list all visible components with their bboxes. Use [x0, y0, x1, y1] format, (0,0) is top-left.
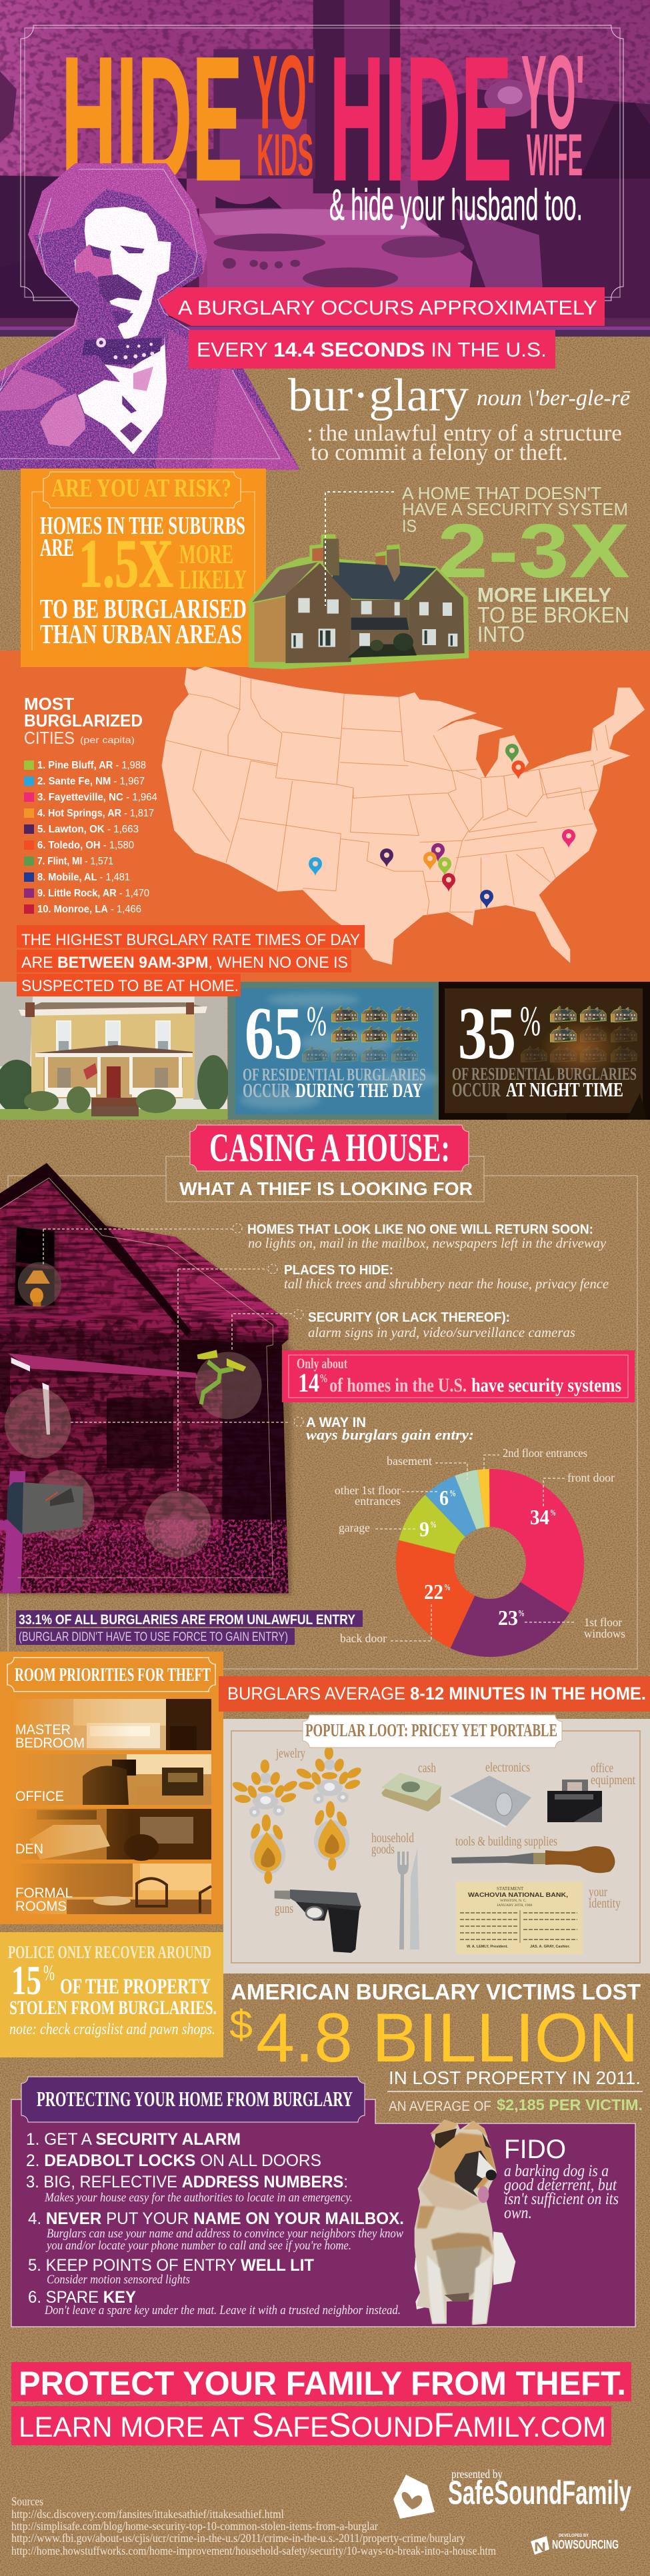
legend list	[37, 760, 157, 915]
magenta haunted house illustration	[0, 1160, 293, 1600]
dog caption: isn't sufficient on its	[504, 2190, 619, 2208]
orange map section background	[0, 650, 650, 982]
burglar portrait	[0, 160, 307, 470]
callout: 14 percent	[282, 1350, 635, 1402]
item: security	[294, 1310, 575, 1340]
legend list: 3. Fayetteville, NC - 1,964	[37, 792, 157, 803]
room: master bedroom: MASTER	[15, 1722, 71, 1738]
protecting label: PROTECTING YOUR HOME FROM BURGLARY	[37, 2087, 353, 2111]
big multiplier: 2-3X	[437, 509, 630, 594]
police line 1: POLICE ONLY RECOVER AROUND	[8, 1942, 211, 1962]
chart values: 22	[424, 1580, 443, 1604]
stat into: INTO	[477, 622, 525, 646]
panel: popular loot	[223, 1715, 650, 1973]
room: office	[13, 1754, 211, 1805]
legend title 1: MOST	[24, 694, 74, 714]
chart values: 34	[530, 1505, 549, 1529]
dollar sign: $	[229, 2002, 253, 2047]
chart values: %	[430, 1520, 437, 1530]
room: formal rooms	[13, 1864, 211, 1914]
chart labels: basement	[387, 1454, 432, 1468]
night caption 2: OCCUR	[452, 1078, 501, 1101]
item: security: SECURITY (OR LACK THEREOF):	[308, 1310, 510, 1325]
room: master bedroom	[13, 1699, 211, 1751]
tips list	[26, 2130, 404, 2317]
times line 1: THE HIGHEST BURGLARY RATE TIMES OF DAY	[21, 931, 360, 949]
big number: 35	[458, 992, 516, 1075]
loot: gun	[275, 1890, 361, 1953]
callout: 14 percent: Only about	[297, 1355, 347, 1372]
source 4: http://home.howstuffworks.com/home-improvement/household-safety/security/10-ways-to-break-into-a-house.htm	[11, 2544, 496, 2557]
banner: highest burglary times	[17, 925, 365, 996]
stat sub line: IN LOST PROPERTY IN 2011.	[389, 2067, 641, 2088]
loot: electronics	[449, 1760, 531, 1828]
stat: billion lost	[229, 1979, 643, 2114]
tips list: 5. KEEP POINTS OF ENTRY WELL LIT	[28, 2256, 314, 2275]
call to action	[11, 2362, 631, 2445]
heading: casing a house: CASING A HOUSE:	[209, 1126, 450, 1170]
legend list: 5. Lawton, OK - 1,663	[37, 824, 139, 835]
house icons, night	[521, 1006, 637, 1062]
chart leader lines	[375, 1455, 574, 1641]
legend list: 2. Sante Fe, NM - 1,967	[37, 776, 145, 787]
presented by text: presented by	[451, 2467, 503, 2481]
dog photo: Fido	[415, 2119, 515, 2325]
panel: 65 percent daytime	[228, 982, 440, 1120]
cta band one	[11, 2362, 631, 2401]
cta band two	[11, 2406, 611, 2445]
stat line 1: A HOME THAT DOESN'T	[402, 483, 601, 503]
police line 2: OF THE PROPERTY	[60, 1975, 211, 1999]
panel: are you at risk	[21, 469, 266, 667]
chart values: %	[550, 1508, 556, 1518]
chart labels	[335, 1446, 625, 1645]
dog caption: good deterrent, but	[504, 2176, 617, 2194]
legend: most burglarized cities	[24, 694, 157, 915]
chart values: 23	[498, 1606, 518, 1630]
tips list: 1. GET A SECURITY ALARM	[26, 2130, 241, 2149]
ornate header frame	[21, 25, 623, 301]
icon: house and heart	[393, 2475, 435, 2519]
risk text: burglarised: TO BE BURGLARISED	[40, 593, 247, 624]
map pins	[309, 744, 575, 908]
chart values: %	[444, 1583, 451, 1593]
subheading: WHAT A THIEF IS LOOKING FOR	[179, 1178, 473, 1199]
source 3: http://www.fbi.gov/about-us/cjis/ucr/crime-in-the-u.s/2011/crime-in-the-u.s.-2011/property-crime/burglary	[11, 2531, 465, 2545]
banner: burglars average minutes: BURGLARS AVERAGE 8-12 MINUTES IN THE HOME.	[227, 1684, 646, 1704]
average text: AN AVERAGE OF	[389, 2099, 491, 2114]
loot: cash: cash	[418, 1761, 436, 1776]
police line 3: STOLEN FROM BURGLARIES.	[9, 1997, 217, 2019]
cta line two: LEARN MORE AT SAFESOUNDFAMILY.COM	[19, 2406, 606, 2444]
tips list: you and/or locate your phone number to call and see if you're home.	[45, 2239, 351, 2253]
heading: casing a house	[190, 1125, 469, 1171]
panel: police recover	[0, 1932, 223, 2057]
subheading box	[166, 1156, 484, 1202]
item: a way in	[294, 1415, 474, 1443]
item: no one home: HOMES THAT LOOK LIKE NO ONE WILL RETURN SOON:	[247, 1222, 593, 1237]
tips list: 3. BIG, REFLECTIVE ADDRESS NUMBERS:	[26, 2173, 348, 2191]
item: no one home	[233, 1222, 607, 1251]
loot: identity statement: JAS. A. GRAY, Cashier.	[530, 1945, 570, 1949]
loot: household goods: goods	[371, 1842, 395, 1857]
chart values: %	[449, 1489, 456, 1499]
police note: note: check craigslist and pawn shops.	[9, 2021, 215, 2038]
chart values	[419, 1486, 556, 1630]
legend list: 4. Hot Springs, AR - 1,817	[37, 808, 154, 819]
legend list: 9. Little Rock, AR - 1,470	[37, 888, 149, 899]
chart labels: entrances	[355, 1494, 401, 1508]
loot: office equipment: equipment	[591, 1773, 635, 1788]
chart labels: front door	[567, 1471, 615, 1484]
tips list: Don't leave a spare key under the mat. Leave it with a trusted neighbor instead.	[44, 2303, 401, 2317]
icon: mailbox	[0, 1471, 83, 1593]
loot: identity statement: WACHOVIA NATIONAL BANK,	[468, 1892, 568, 1899]
band one	[159, 287, 605, 326]
purple ledge strip	[0, 318, 650, 337]
loot: identity statement: JANUARY 20TH, 1908	[497, 1904, 532, 1908]
risk label	[43, 472, 241, 508]
checklist: what a thief looks for	[233, 1222, 635, 1443]
definition	[288, 370, 631, 465]
item: a way in: A WAY IN	[306, 1415, 366, 1430]
meaning line 1: : the unlawful entry of a structure	[307, 420, 622, 446]
thin frame around casing section	[8, 1176, 637, 1669]
panel: 35 percent night	[439, 982, 650, 1120]
loot: identity statement: your	[589, 1885, 607, 1900]
loot: identity statement	[456, 1882, 621, 1954]
band two	[189, 330, 555, 369]
dotted callout to house	[325, 492, 394, 606]
orange patch under risk panel	[21, 650, 266, 667]
tips list: Burglars can use your name and address to convince your neighbors they know	[47, 2227, 403, 2241]
house photo: yellow house	[0, 982, 229, 1120]
chart values: %	[518, 1609, 525, 1619]
chart values: 6	[439, 1486, 449, 1510]
item: places to hide	[268, 1263, 609, 1292]
loot: chisel	[451, 1834, 615, 1873]
chart labels: other 1st floor	[335, 1484, 401, 1497]
callout: 14 percent: 14	[298, 1368, 319, 1398]
pronunciation: noun \'ber-gle-rē	[477, 386, 631, 411]
item: places to hide: tall thick trees and shrubbery near the house, privacy fence	[284, 1276, 609, 1292]
chart labels: windows	[584, 1627, 625, 1640]
title: YO'	[253, 35, 315, 151]
nowsourcing wordmark: NOWSOURCING	[552, 2538, 619, 2551]
tips list: 4. NEVER PUT YOUR NAME ON YOUR MAILBOX.	[28, 2209, 404, 2228]
headword: bur·glary	[288, 370, 469, 421]
icon: lamp in window	[18, 1262, 61, 1307]
banner: unlawful entry	[16, 1610, 363, 1645]
room label: ROOM PRIORITIES FOR THEFT	[15, 1664, 211, 1686]
stat more likely: MORE LIKELY	[477, 583, 611, 607]
protecting label	[21, 2077, 365, 2122]
house icons, daytime	[302, 1006, 418, 1062]
legend title 3: CITIES	[24, 728, 75, 748]
tips list: 2. DEADBOLT LOCKS ON ALL DOORS	[26, 2151, 321, 2170]
unlawful entry note: (BURGLAR DIDN'T HAVE TO USE FORCE TO GAIN ENTRY)	[19, 1630, 288, 1644]
day caption 2: OCCUR	[243, 1078, 290, 1102]
loot: chisel: tools & building supplies	[455, 1834, 557, 1849]
loot: household goods: household	[371, 1831, 414, 1846]
tips list: Consider motion sensored lights	[47, 2273, 190, 2287]
loot: identity statement: identity	[589, 1896, 621, 1911]
legend swatches	[24, 760, 34, 914]
donut chart: burglar entry points	[335, 1446, 625, 1645]
risk text: more: MORE	[179, 539, 233, 569]
police number: 15	[11, 1958, 41, 2003]
loot: jewelry	[231, 1746, 363, 1884]
percent sign: %	[307, 997, 327, 1044]
item: a way in: ways burglars gain entry:	[306, 1426, 474, 1443]
dog caption: own.	[504, 2204, 532, 2222]
room: office: OFFICE	[15, 1789, 64, 1804]
room: den	[13, 1809, 211, 1861]
title: HIDE	[61, 20, 243, 218]
unlawful entry text: 33.1% OF ALL BURGLARIES ARE FROM UNLAWFUL ENTRY	[19, 1612, 355, 1628]
chart labels: back door	[340, 1632, 387, 1645]
tips list: Makes your house easy for the authorities to locate in an emergency.	[44, 2191, 353, 2205]
loot: household goods	[371, 1831, 419, 1949]
loot: identity statement: W. A. LEMLY, President.	[467, 1945, 508, 1949]
stat broken: TO BE BROKEN	[477, 603, 629, 627]
big figure: 4.8 BILLION	[256, 1999, 639, 2077]
chart labels: 1st floor	[584, 1616, 622, 1629]
loot: identity statement: WINSTON, N. C.	[500, 1899, 527, 1903]
title: KIDS	[257, 121, 313, 188]
legend note: (per capita)	[80, 734, 135, 745]
dashed callout lines	[43, 1229, 293, 1491]
room: formal rooms: ROOMS	[15, 1899, 67, 1914]
brick house photo with green outline	[247, 535, 469, 669]
chart values: 9	[419, 1517, 429, 1541]
loot: office equipment: office	[591, 1761, 613, 1776]
risk text: HOMES IN THE SUBURBS	[40, 512, 245, 540]
header dining room photo	[0, 0, 650, 327]
risk number: 1.5X	[79, 526, 173, 602]
shadow beneath magenta house	[0, 1168, 291, 1595]
source 2: http://simplisafe.com/blog/home-security-top-10-common-stolen-items-from-a-burglar	[11, 2519, 378, 2533]
panel: protecting your home	[11, 2077, 635, 2327]
loot: office equipment	[547, 1761, 635, 1822]
legend list: 7. Flint, MI - 1,571	[37, 856, 113, 867]
sources heading: Sources	[11, 2495, 43, 2508]
tips list: 6. SPARE KEY	[28, 2288, 136, 2307]
gun label: guns	[275, 1902, 293, 1916]
item: security: alarm signs in yard, video/surveillance cameras	[308, 1324, 575, 1340]
chart labels: 2nd floor entrances	[503, 1446, 587, 1460]
legend list: 10. Monroe, LA - 1,466	[37, 904, 141, 915]
room label	[7, 1658, 215, 1692]
item: no one home: no lights on, mail in the mailbox, newspapers left in the driveway	[248, 1235, 607, 1251]
panel: room priorities	[0, 1652, 223, 1924]
times line 3: SUSPECTED TO BE AT HOME.	[21, 977, 239, 995]
dog caption: FIDO	[504, 2135, 566, 2164]
icon: security cameras	[197, 1350, 246, 1404]
cta line one: PROTECT YOUR FAMILY FROM THEFT.	[19, 2365, 626, 2402]
loot: identity statement: STATEMENT	[497, 1886, 524, 1892]
big number: 65	[245, 992, 303, 1075]
loot: jewelry: jewelry	[275, 1746, 305, 1761]
loot: electronics: electronics	[485, 1760, 530, 1775]
item: places to hide: PLACES TO HIDE:	[284, 1263, 393, 1278]
loot: cash	[381, 1761, 441, 1812]
US map	[162, 666, 645, 964]
callout: 14 percent: %	[320, 1372, 327, 1385]
chart labels: garage	[339, 1521, 370, 1534]
banner line two: EVERY 14.4 SECONDS IN THE U.S.	[197, 338, 547, 361]
risk label: ARE YOU AT RISK?	[51, 474, 231, 503]
percent sign: %	[520, 997, 541, 1044]
stat heading: AMERICAN BURGLARY VICTIMS LOST	[231, 1979, 641, 2004]
day caption 3: DURING THE DAY	[295, 1078, 423, 1102]
meaning line 2: to commit a felony or theft.	[311, 439, 568, 465]
N badge: N	[534, 2541, 546, 2555]
inner frame line on house	[0, 1178, 273, 1578]
average amount: $2,185 PER VICTIM.	[497, 2096, 643, 2113]
legend list: 6. Toledo, OH - 1,580	[37, 840, 134, 851]
legend list: 8. Mobile, AL - 1,481	[37, 872, 130, 883]
banner line one: A BURGLARY OCCURS APPROXIMATELY	[178, 296, 597, 319]
loot label	[303, 1715, 562, 1748]
security stat: 2-3x	[402, 483, 630, 646]
dog caption	[504, 2135, 619, 2222]
stat line 2: HAVE A SECURITY SYSTEM	[402, 499, 628, 519]
legend title 2: BURGLARIZED	[24, 710, 143, 730]
developed by: DEVELOPED BY	[559, 2533, 589, 2538]
risk text: urban: THAN URBAN AREAS	[40, 619, 242, 649]
presented by logo	[393, 2467, 631, 2519]
risk text: are: ARE	[40, 534, 74, 562]
police percent: %	[43, 1961, 55, 1985]
room: formal rooms: FORMAL	[15, 1886, 73, 1901]
callout: 14 percent: have security systems	[471, 1374, 621, 1396]
callout: 14 percent: of homes in the U.S.	[329, 1374, 467, 1396]
source 1: http://dsc.discovery.com/fansites/ittakesathief/ittakesathief.html	[11, 2507, 284, 2521]
stat line 3: IS	[402, 516, 417, 536]
day caption 1: OF RESIDENTIAL BURGLARIES	[243, 1065, 426, 1084]
dog caption: a barking dog is a	[504, 2162, 609, 2180]
times line 2: ARE BETWEEN 9AM-3PM, WHEN NO ONE IS	[21, 954, 348, 972]
legend list: 1. Pine Bluff, AR - 1,988	[37, 760, 146, 771]
banner: burglars average minutes	[219, 1676, 650, 1712]
room: den: DEN	[15, 1842, 43, 1857]
room: master bedroom: BEDROOM	[15, 1736, 85, 1751]
banner: burglary frequency	[159, 287, 605, 369]
sources	[11, 2495, 496, 2557]
risk text: likely: LIKELY	[179, 564, 247, 595]
NowSourcing logo	[531, 2533, 619, 2555]
